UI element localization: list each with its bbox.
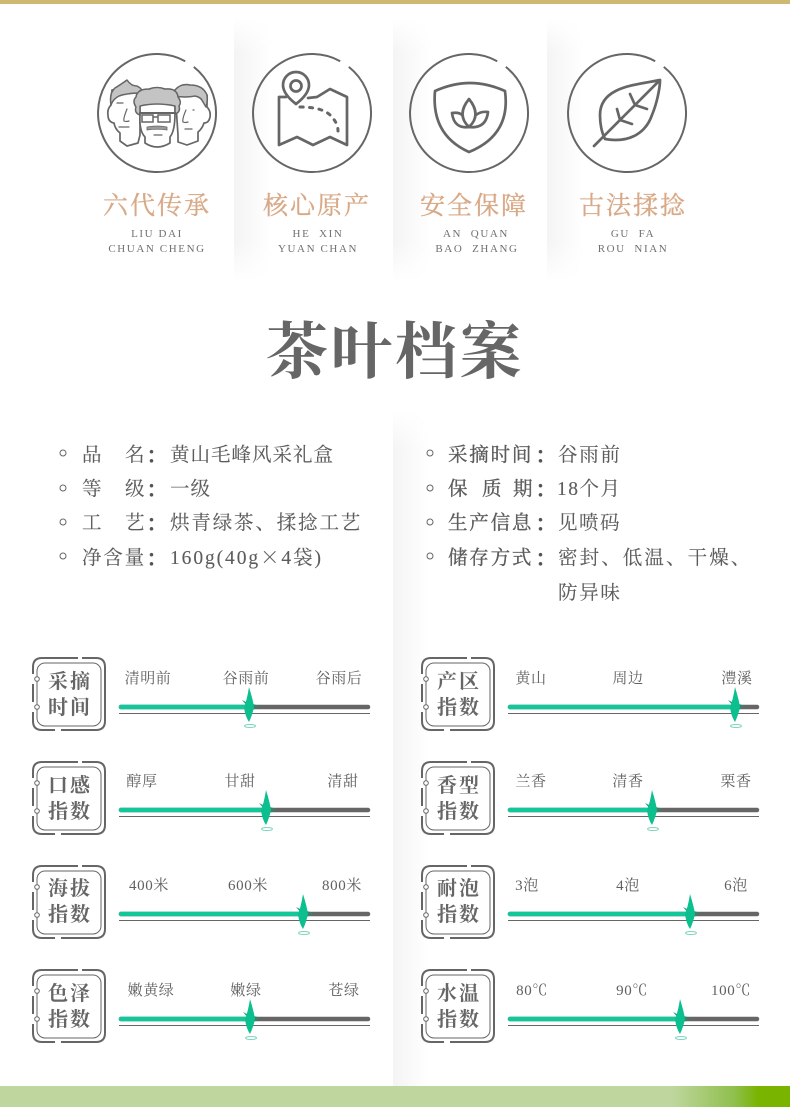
gauge: taste: 清甜 [327, 773, 359, 790]
gauge: water temperature: 80℃ [516, 983, 548, 999]
tea profile list: right: 见喷码 [558, 512, 621, 534]
tea profile list: left: 净含量 [82, 547, 146, 569]
gauge: water temperature [422, 970, 759, 1042]
gauge: taste: 口感 [48, 773, 92, 797]
gauge: origin [422, 658, 759, 730]
gauge: picking time: 时间 [48, 696, 92, 719]
gauge: altitude: 600米 [228, 877, 268, 894]
tea profile list: right: 防异味 [558, 582, 622, 604]
gauge: steeping: 4泡 [616, 877, 640, 894]
pinyin text: BAO ZHANG [435, 243, 519, 255]
gauge: aroma: 栗香 [720, 773, 752, 790]
gauge: water temperature: 90℃ [616, 983, 648, 999]
gauge: picking time [33, 658, 370, 730]
gauge: taste: 醇厚 [126, 773, 158, 790]
gauge: origin: 产区 [437, 670, 481, 693]
gauge: picking time: 谷雨前 [223, 670, 269, 687]
gauge: aroma: 指数 [437, 800, 481, 823]
pinyin text [278, 228, 358, 255]
feature: safety [410, 54, 528, 255]
pinyin text [598, 228, 668, 255]
gauge: steeping: 耐泡 [437, 877, 481, 900]
gauge: colour: 色泽 [48, 982, 92, 1005]
gauge: origin: 指数 [437, 696, 481, 719]
title text: 古法揉捻 [579, 192, 687, 220]
tea profile list: left: 一级 [170, 478, 211, 500]
gauge: altitude [33, 866, 370, 938]
tea profile list: right: 谷雨前 [558, 444, 622, 466]
tea profile list: left: 艺 [125, 512, 146, 534]
gauge: water temperature: 指数 [437, 1008, 481, 1031]
gauge: taste: 指数 [48, 800, 92, 823]
gauge: aroma: 兰香 [515, 773, 547, 790]
icon: shield with leaves [410, 54, 528, 172]
feature: traditional rolling [568, 54, 687, 255]
tea profile list: right: 期 [513, 478, 534, 500]
feature: six generations [98, 54, 216, 255]
gauge: water temperature: 水温 [437, 982, 481, 1005]
top gold bar [0, 0, 790, 4]
gauge: colour: 苍绿 [328, 981, 360, 999]
gauge: colour: 嫩黄绿 [128, 981, 174, 999]
gauge: colour [33, 970, 370, 1042]
tea profile list: right: 密封、低温、干燥、 [558, 547, 752, 569]
tea profile list: right: ： [531, 545, 550, 572]
title text: 安全保障 [420, 192, 528, 220]
tea profile list: right: ： [531, 442, 550, 469]
tea profile list: right: 采摘时间 [448, 444, 533, 466]
gauge: origin: 周边 [612, 670, 644, 687]
pinyin text: YUAN CHAN [278, 243, 358, 255]
icon: leaf [568, 54, 686, 172]
title text: 核心原产 [263, 192, 371, 220]
gauge: origin: 澧溪 [721, 669, 753, 687]
pinyin text: ROU NIAN [598, 243, 668, 255]
pinyin text: GU FA [611, 228, 655, 240]
feature: core origin [253, 54, 371, 255]
gauge: picking time: 采摘 [48, 670, 92, 693]
tea profile list: left: ： [142, 476, 161, 503]
pinyin text [435, 228, 519, 255]
heading: 茶叶档案 [266, 318, 524, 387]
tea profile list: right: 保 [448, 478, 469, 500]
tea profile list: right: 质 [482, 478, 503, 500]
gauge: steeping: 3泡 [515, 877, 539, 894]
gauge: steeping: 6泡 [724, 877, 748, 894]
tea profile list: left [60, 442, 362, 572]
icon: three faces [98, 54, 216, 172]
gauge: picking time: 清明前 [125, 670, 171, 687]
tea profile list: right: 储存方式 [448, 547, 533, 569]
pinyin text: LIU DAI [131, 228, 183, 240]
tea profile list: left: 工 [82, 513, 103, 534]
tea profile list: left: 黄山毛峰风采礼盒 [170, 444, 334, 466]
gauge: altitude: 海拔 [48, 877, 92, 900]
tea profile list: right: ： [531, 476, 550, 503]
title text: 六代传承 [103, 192, 211, 220]
tea profile list: left: 品 [82, 444, 103, 466]
pinyin text [108, 228, 206, 255]
gauge: picking time: 谷雨后 [316, 670, 362, 687]
feature row [98, 54, 687, 255]
tea profile list: left: 等 [82, 478, 103, 500]
footer green bar [0, 1086, 790, 1107]
icon: map and pin [253, 54, 371, 172]
tea profile list: left: ： [142, 545, 161, 572]
tea profile list: left: ： [142, 442, 161, 469]
gauge: steeping: 指数 [437, 903, 481, 926]
gauge: colour: 指数 [48, 1008, 92, 1031]
gauge: steeping [422, 866, 759, 938]
gauge: altitude: 指数 [48, 903, 92, 926]
tea profile list: left: 烘青绿茶、揉捻工艺 [170, 512, 362, 534]
tea profile list: left: 160g(40g×4袋) [170, 542, 322, 570]
gauge: taste: 甘甜 [224, 773, 256, 790]
tea profile list: left: 级 [125, 478, 146, 500]
tea profile list: right: ： [531, 510, 550, 537]
gauge: taste [33, 762, 370, 834]
gauge: water temperature: 100℃ [711, 983, 751, 999]
pinyin text: CHUAN CHENG [108, 243, 206, 255]
tea profile list: left: ： [142, 510, 161, 537]
gauge: aroma: 清香 [612, 773, 644, 790]
pinyin text: HE XIN [293, 228, 343, 240]
tea profile list: right: 18个月 [557, 478, 622, 500]
gauge: altitude: 400米 [129, 877, 169, 894]
tea profile list: left: 名 [125, 444, 146, 466]
pinyin text: AN QUAN [443, 228, 509, 240]
gauge: colour: 嫩绿 [230, 981, 262, 999]
gauge: aroma [422, 762, 759, 834]
gauge: altitude: 800米 [322, 877, 362, 894]
gauge: aroma: 香型 [437, 774, 481, 797]
gauge: origin: 黄山 [515, 669, 547, 687]
tea profile list: right [427, 442, 752, 604]
tea profile list: right: 生产信息 [448, 512, 533, 534]
